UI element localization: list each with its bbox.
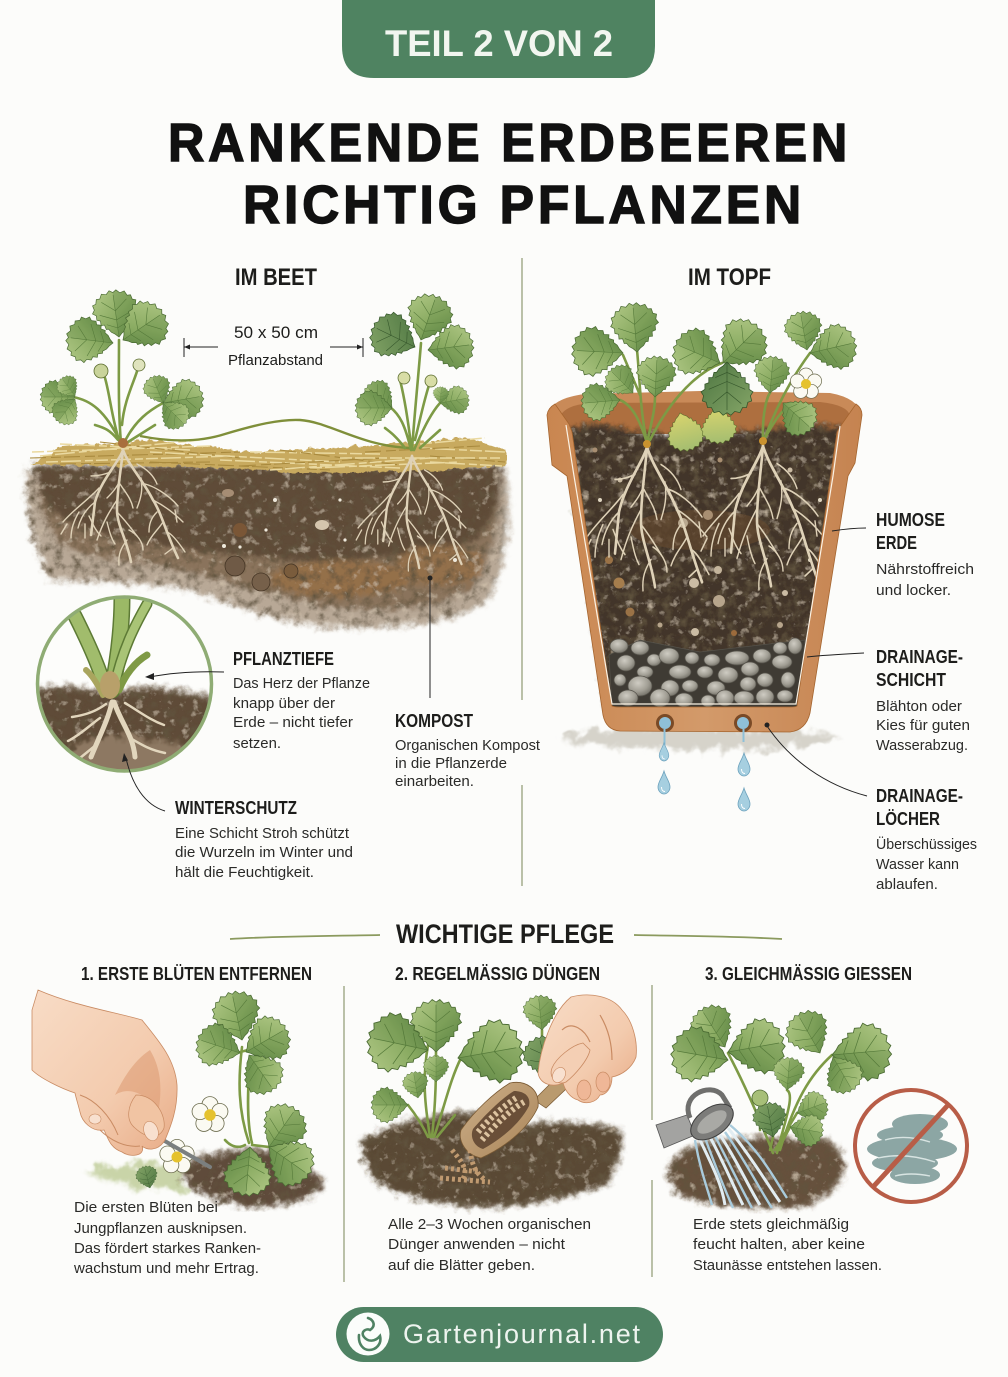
plant [667, 997, 894, 1153]
soil [362, 1113, 621, 1207]
callout: Humose Erde: HUMOSE [876, 510, 945, 530]
callout: Humose Erde [832, 510, 974, 599]
heading: 3. GLEICHMÄSSIG GIESSEN [705, 964, 912, 984]
pot front walls [547, 404, 862, 732]
callout: Drainageschicht: Blähton oder [876, 698, 962, 715]
panel: bed cross-section [26, 287, 508, 628]
hand [538, 995, 636, 1103]
callout: Winterschutz: hält die Feuchtigkeit. [175, 864, 314, 881]
soil in detail [39, 679, 209, 752]
soil pebbles [592, 448, 822, 636]
water streams [695, 1125, 787, 1208]
text: feucht halten, aber keine [693, 1236, 865, 1253]
header pill: Teil 2 von 2: TEIL 2 VON 2 [385, 23, 613, 64]
callout: Drainagelöcher: LÖCHER [876, 809, 940, 829]
panel: care 3 [656, 964, 967, 1274]
text [73, 1199, 261, 1277]
gravel drainage layer [609, 638, 805, 708]
text: Dünger anwenden – nicht [388, 1236, 566, 1253]
text: Jungpflanzen ausknipsen. [74, 1220, 247, 1237]
heading: 1. ERSTE BLÜTEN ENTFERNEN [81, 964, 312, 984]
callout: Pflanztiefe: Das Herz der Pflanze [233, 675, 370, 692]
spacing measure: Pflanzabstand [228, 352, 323, 369]
soil [669, 1138, 845, 1208]
roots: right plant [356, 456, 468, 571]
water drops [658, 743, 750, 811]
runner between plants [140, 420, 410, 448]
pot back rim [547, 391, 862, 432]
callout: Humose Erde: ERDE [876, 533, 917, 553]
pebbles in soil [222, 489, 457, 591]
footer pill: Gartenjournal.net [403, 1319, 640, 1349]
spacing measure: 50 x 50 cm [234, 323, 318, 342]
callout: Winterschutz [122, 753, 353, 881]
icon: logo [346, 1312, 390, 1356]
pot roots [585, 447, 709, 591]
section heading: Wichtige Pflege [230, 919, 782, 949]
roots: left plant [61, 450, 185, 565]
title [168, 113, 851, 235]
watering can [656, 1090, 740, 1148]
detail circle: planting depth [37, 596, 213, 780]
straw mulch [30, 438, 506, 473]
callout: Winterschutz: die Wurzeln im Winter und [175, 844, 353, 861]
callout: Winterschutz: WINTERSCHUTZ [175, 798, 297, 818]
pot soil [566, 424, 843, 712]
pot plant stems [620, 350, 810, 443]
icon: no waterlogging [855, 1090, 967, 1202]
panel: care 1 [32, 964, 324, 1277]
flowers [160, 1097, 228, 1173]
text: Erde stets gleichmäßig [693, 1216, 849, 1233]
heading: Im Beet: IM BEET [235, 264, 317, 291]
plant [362, 994, 570, 1137]
ground shadow [562, 726, 838, 750]
callout: Drainageschicht: DRAINAGE- [876, 647, 963, 667]
text: Die ersten Blüten bei [74, 1199, 218, 1216]
footer pill [336, 1307, 663, 1362]
ground [85, 1150, 324, 1207]
callout: Drainagelöcher: DRAINAGE- [876, 786, 963, 806]
text: Das fördert starkes Ranken- [74, 1240, 261, 1257]
plant: left [40, 287, 207, 448]
callout: Drainageschicht: SCHICHT [876, 670, 946, 690]
callout: Drainagelöcher: ablaufen. [876, 876, 938, 893]
section heading: Wichtige Pflege: WICHTIGE PFLEGE [396, 919, 614, 949]
callout: Pflanztiefe: setzen. [233, 735, 281, 752]
callout: Pflanztiefe [145, 649, 370, 752]
text: Alle 2–3 Wochen organischen [388, 1216, 591, 1233]
callout: Drainagelöcher: Wasser kann [876, 856, 959, 873]
header pill: Teil 2 von 2 [342, 0, 655, 78]
callout: Winterschutz: Eine Schicht Stroh schützt [175, 825, 350, 842]
text: wachstum und mehr Ertrag. [73, 1260, 259, 1277]
text: auf die Blätter geben. [388, 1257, 535, 1274]
callout: Drainageschicht: Kies für guten [876, 717, 970, 734]
panel: care 2 [362, 964, 636, 1274]
plant [134, 987, 323, 1198]
title: RICHTIG PFLANZEN [243, 175, 805, 235]
heading: Im Topf: IM TOPF [688, 264, 771, 291]
callout: Drainageschicht [807, 647, 970, 754]
callout: Pflanztiefe: knapp über der [233, 695, 335, 712]
callout: Kompost: in die Pflanzerde [395, 755, 507, 772]
callout: Drainagelöcher: Überschüssiges [876, 835, 977, 853]
callout: Drainagelöcher [764, 722, 977, 893]
title: RANKENDE ERDBEEREN [168, 113, 851, 173]
callout: Kompost [395, 576, 541, 790]
scoop with fertiliser [440, 1062, 584, 1182]
detail stems [75, 596, 147, 695]
text [388, 1216, 591, 1274]
heading: 2. REGELMÄSSIG DÜNGEN [395, 964, 600, 984]
callout: Pflanztiefe: Erde – nicht tiefer [233, 714, 353, 731]
callout: Pflanztiefe: PFLANZTIEFE [233, 649, 334, 669]
callout: Drainageschicht: Wasserabzug. [876, 737, 968, 754]
plant: right [355, 288, 476, 450]
detail roots [68, 702, 165, 758]
callout: Kompost: KOMPOST [395, 711, 473, 731]
spacing measure [184, 323, 363, 369]
text: Staunässe entstehen lassen. [693, 1257, 882, 1274]
soil layer [26, 465, 508, 628]
panel: pot cross-section [547, 301, 862, 811]
callout: Kompost: Organischen Kompost [395, 737, 541, 754]
callout: Humose Erde: und locker. [876, 582, 951, 599]
pot plant leaves [571, 301, 861, 456]
text [693, 1216, 882, 1274]
drainage holes [656, 714, 752, 745]
callout: Kompost: einarbeiten. [395, 773, 474, 790]
callout: Humose Erde: Nährstoffreich [876, 561, 974, 578]
hand with scissors [32, 990, 210, 1167]
